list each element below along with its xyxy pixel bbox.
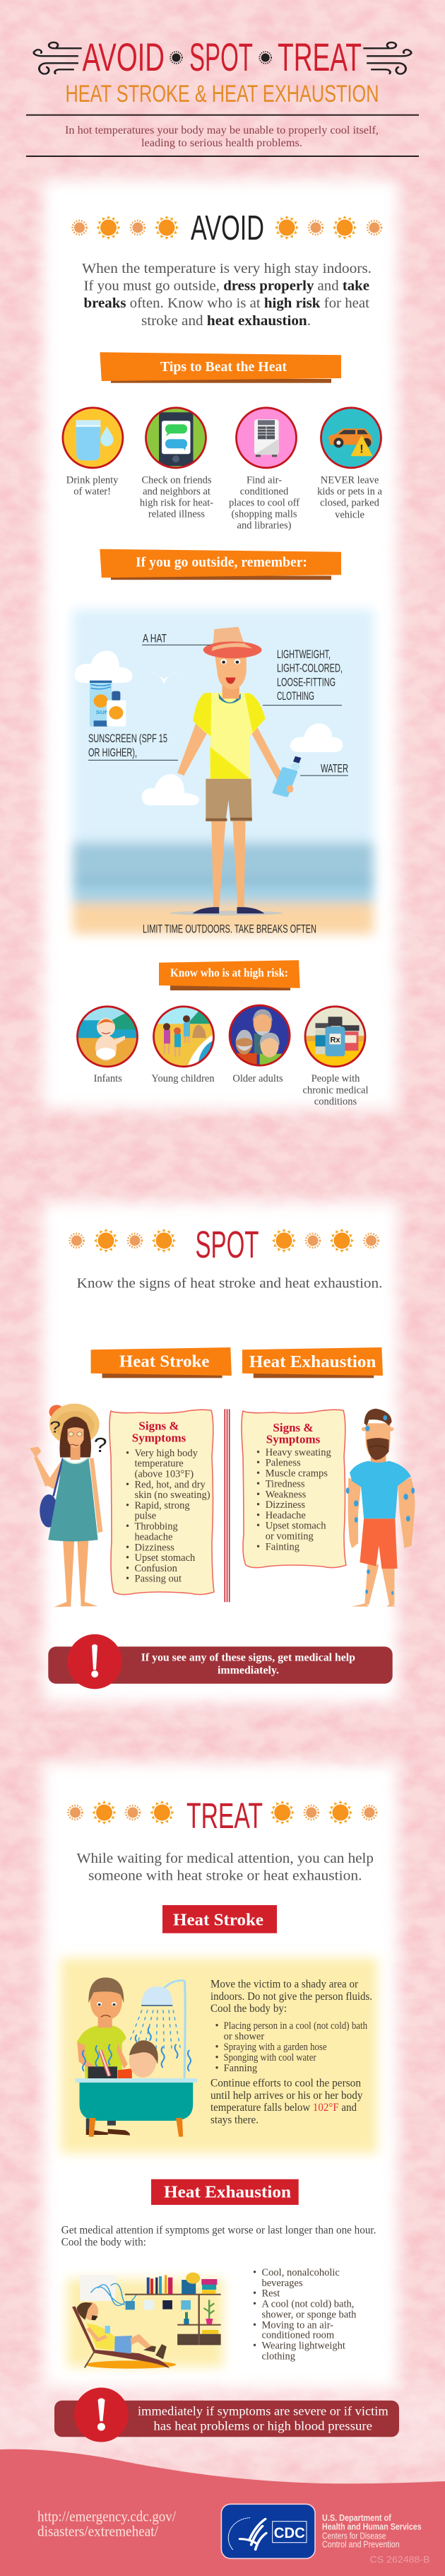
heat exhaustion symptom list: Weakness [266,1489,307,1500]
clothing labels: LIGHTWEIGHT, [277,648,331,661]
title: SPOT [189,35,253,79]
heat exhaustion cooling list: conditioned room [261,2330,335,2341]
footer link: http://emergency.cdc.gov/ [37,2508,176,2525]
risk captions: Infants [94,1073,122,1084]
CDC HHS logo [221,2504,315,2558]
heat exhaustion cooling list [253,2267,357,2362]
heat stroke symptom list: • [126,1574,129,1585]
heat stroke symptom list: skin (no sweating) [134,1489,210,1501]
heat exhaustion symptom list: • [256,1489,260,1500]
risk captions: People with [312,1073,360,1084]
heat stroke symptom list: Rapid, strong [134,1500,190,1511]
risk captions: conditions [314,1096,357,1107]
heat exhaustion cooling list: • [253,2298,256,2309]
title [82,35,362,79]
heat exhaustion symptom list: Dizziness [266,1499,305,1511]
icon: car with warning sign: ! [360,442,364,455]
intro text [65,124,379,149]
heat stroke instructions: temperature falls below 102°F and [210,2102,357,2114]
heat exhaustion cooling list: beverages [261,2278,303,2289]
heat exhaustion cooling list: • [253,2267,256,2278]
heat stroke symptom list: headache [134,1531,172,1542]
heat stroke instructions: Move the victim to a shady area or [210,1979,359,1991]
heat stroke instructions: indoors. Do not give the person fluids. [210,1991,372,2003]
heat stroke symptom list: • [126,1500,129,1511]
panel: heat stroke treatment [61,1958,377,2153]
risk captions: Young children [151,1073,215,1084]
header [26,35,419,157]
icon: glass of water [63,408,123,468]
signs and symptoms heading: Signs & [138,1419,179,1433]
footer link [37,2508,176,2539]
HHS and CDC department text [322,2513,422,2549]
treat intro text: While waiting for medical attention, you can help [76,1851,374,1866]
signs and symptoms heading [266,1421,321,1446]
callout: get medical help: If you see any of these signs, get medical help [141,1651,355,1663]
heat stroke symptom list [126,1448,210,1585]
icon: young children on beach [153,1006,214,1067]
clouds, bird [74,651,343,752]
avoid intro text [82,261,372,329]
banner: know who is at high risk: Know who is at high risk: [170,966,288,980]
avoid intro text: If you must go outside, dress properly and take [83,279,369,294]
heat exhaustion symptom list: • [256,1521,260,1532]
risk captions: chronic medical [302,1084,369,1096]
heat exhaustion symptom list: Paleness [266,1458,301,1469]
banner: know who is at high risk [159,960,300,990]
sunscreen bottles: SUN [96,710,109,715]
banner: if you go outside [100,549,341,580]
tip captions: vehicle [335,509,364,520]
banner: tips to beat the heat: Tips to Beat the Heat [160,359,287,375]
tip captions: kids or pets in a [317,486,382,497]
signs and symptoms heading: Symptoms [266,1432,321,1446]
heat stroke symptom list: temperature [134,1458,184,1470]
heat exhaustion symptom list: • [256,1478,260,1489]
heat exhaustion symptom list: Upset stomach [266,1521,326,1532]
heat stroke symptom list: Very high body [134,1448,198,1459]
heat exhaustion symptom list: • [256,1541,260,1552]
icon: exclamation [74,2388,129,2442]
icon: older adults [230,1005,290,1072]
clothing labels: LIGHT-COLORED, [277,662,343,675]
heat stroke symptom list: • [126,1448,129,1459]
heat stroke symptom list: Dizziness [134,1542,174,1553]
label: heat exhaustion: Heat Exhaustion [164,2183,291,2201]
heat exhaustion cooling list: A cool (not cold) bath, [261,2298,354,2309]
tip captions: conditioned [240,486,289,497]
signs and symptoms heading: Symptoms [132,1431,186,1444]
heat stroke symptom list: Throbbing [134,1521,178,1533]
card: heat exhaustion signs and symptoms [242,1410,346,1568]
HHS and CDC department text: Health and Human Services [322,2522,422,2532]
HHS and CDC department text: U.S. Department of [322,2513,391,2523]
heat exhaustion cooling list: • [253,2341,256,2352]
banner: heat stroke [91,1347,232,1378]
heat stroke instructions: Spraying with a garden hose [224,2042,327,2053]
heat exhaustion symptom list: Headache [266,1510,306,1521]
banner: heat stroke: Heat Stroke [119,1352,210,1371]
tip captions: of water! [73,486,111,497]
banner: heat exhaustion [242,1347,383,1378]
heat exhaustion symptom list: Muscle cramps [266,1468,328,1480]
heat exhaustion cooling list: Moving to an air- [261,2319,333,2331]
heat exhaustion symptom list: Heavy sweating [266,1447,331,1458]
heat stroke instructions: Placing person in a cool (not cold) bath [224,2020,368,2032]
clothing labels: A HAT [143,631,167,645]
heat exhaustion symptom list: • [256,1468,260,1480]
callout: seek help immediately [54,2388,399,2442]
tip captions: closed, parked [320,497,380,508]
panel: treat [42,1762,398,2389]
heat exhaustion intro: Cool the body with: [61,2237,146,2249]
heat exhaustion intro: Get medical attention if symptoms get worse or last longer than one hour. [61,2224,376,2236]
callout: get medical help: immediately. [218,1664,279,1676]
heat stroke symptom list: • [126,1479,129,1490]
intro text: In hot temperatures your body may be unable to properly cool itself, [65,124,379,136]
spot intro text: Know the signs of heat stroke and heat exhaustion. [76,1276,383,1292]
illustration: woman with heat stroke: ? [49,1419,61,1436]
callout: seek help immediately: has heat problems or high blood pressure [153,2418,372,2432]
heat exhaustion symptom list [256,1447,331,1552]
icon: left wind swirl [34,42,81,74]
HHS and CDC department text: Centers for Disease [322,2531,386,2541]
tip captions: related illness [148,508,205,520]
tip captions: high risk for heat- [140,497,213,508]
icon: exclamation [68,1634,122,1689]
heat exhaustion symptom list: • [256,1499,260,1511]
label: heat stroke: Heat Stroke [173,1911,263,1929]
heat exhaustion symptom list: • [256,1458,260,1469]
icon: right wind swirl [364,42,411,74]
icon: phone with text messages [146,408,206,468]
section heading: treat [68,1796,376,1836]
signs and symptoms heading [132,1419,186,1444]
man figure [142,627,301,915]
heat exhaustion cooling list: • [253,2288,256,2299]
section heading: spot: SPOT [195,1224,259,1266]
clothing labels: OR HIGHER), [88,746,137,759]
heat exhaustion cooling list: clothing [261,2350,295,2362]
banner: tips to beat the heat [100,352,341,383]
heat exhaustion symptom list: Fainting [266,1541,299,1552]
tip captions [66,474,382,531]
treat intro text [76,1851,374,1883]
heat stroke instructions [210,1979,372,2126]
clothing labels [88,631,348,935]
heat stroke instructions: • [215,2042,219,2053]
panel: spot [30,1202,415,1704]
heat exhaustion symptom list: or vomiting [266,1531,314,1542]
heat stroke instructions: Sponging with cool water [224,2052,316,2063]
sunscreen bottles [90,681,126,727]
heat stroke symptom list: Confusion [134,1563,178,1574]
heat stroke symptom list: • [126,1542,129,1553]
heat stroke symptom list: Passing out [134,1574,182,1585]
heat stroke instructions: Cool the body by: [210,2003,287,2015]
tip captions: Check on friends [141,474,212,486]
heat stroke instructions: Continue efforts to cool the person [210,2078,361,2090]
heat stroke symptom list: Red, hot, and dry [134,1479,206,1490]
label: heat exhaustion [151,2179,299,2205]
clothing labels: CLOTHING [277,689,314,703]
publication code: CS 262488-B [370,2554,429,2565]
title: TREAT [278,35,362,79]
heat exhaustion symptom list: Tiredness [266,1478,305,1489]
heat stroke instructions: • [215,2020,219,2032]
heat stroke symptom list: • [126,1521,129,1533]
footer link: disasters/extremeheat/ [37,2522,158,2539]
tip captions: and neighbors at [143,486,210,497]
heat exhaustion cooling list: • [253,2319,256,2331]
HHS and CDC department text: Control and Prevention [322,2539,400,2549]
heat stroke instructions: or shower [224,2031,264,2042]
icon: car with warning sign [321,408,381,468]
clothing labels: SUNSCREEN (SPF 15 [88,732,167,745]
illustration: man resting on lounger with water [67,2273,223,2369]
intro text: leading to serious health problems. [141,137,302,149]
heat stroke symptom list: pulse [134,1511,156,1522]
heat stroke symptom list: • [126,1552,129,1564]
illustration: woman with heat stroke [30,1404,107,1607]
illustration: sweating man with heat exhaustion [346,1409,415,1607]
heat stroke symptom list: • [126,1563,129,1574]
heat exhaustion symptom list: • [256,1510,260,1521]
tip captions: (shopping malls [231,508,297,520]
illustration: woman with heat stroke: ? [94,1434,107,1456]
heat stroke symptom list: (above 103°F) [134,1468,194,1480]
heat exhaustion cooling list: shower, or sponge bath [261,2309,357,2320]
heat exhaustion cooling list: Rest [261,2288,280,2299]
callout: get medical help [48,1634,393,1689]
title: AVOID [82,35,165,79]
tip captions: NEVER leave [321,474,379,486]
tip captions: and libraries) [237,520,292,531]
icon: title sun 2 [259,52,271,64]
icon: infant on beach [77,1006,138,1067]
treat intro text: someone with heat stroke or heat exhaustion. [88,1868,362,1883]
avoid intro text: breaks often. Know who is at high risk for heat [83,295,369,311]
section heading: treat: TREAT [186,1796,263,1836]
clothing labels: LOOSE-FITTING [277,676,336,689]
section heading: avoid [72,209,381,247]
avoid intro text: When the temperature is very high stay indoors. [82,261,372,276]
footer [0,2449,445,2576]
illustration: man dressed for the beach [73,609,374,935]
section heading: avoid: AVOID [191,209,264,247]
heat stroke symptom list: Upset stomach [134,1552,196,1564]
tip captions: Find air- [247,474,282,486]
section heading: spot [69,1224,379,1266]
panel: avoid [42,179,398,1110]
card: heat stroke signs and symptoms [109,1410,214,1595]
heat exhaustion intro [61,2224,376,2249]
banner: heat exhaustion: Heat Exhaustion [249,1353,376,1371]
heat stroke instructions: • [215,2063,219,2074]
banner: if you go outside: If you go outside, remember: [136,555,307,570]
avoid intro text: stroke and heat exhaustion . [141,313,311,329]
icon: title sun 1 [170,52,182,64]
heat exhaustion cooling list: Wearing lightweight [261,2341,345,2352]
heat stroke instructions: Fanning [224,2063,257,2074]
CDC HHS logo: CDC [274,2525,305,2541]
beach background [73,609,374,934]
risk captions [94,1073,368,1107]
signs and symptoms heading: Signs & [273,1421,314,1434]
clothing labels: LIMIT TIME OUTDOORS. TAKE BREAKS OFTEN [143,922,316,935]
label: heat stroke [162,1905,277,1933]
tip captions: Drink plenty [66,474,119,486]
tip captions: places to cool off [229,497,299,508]
icon: portable air conditioner [236,408,297,468]
illustration: person cooled in bathtub shower [75,1977,197,2137]
heat exhaustion symptom list: • [256,1447,260,1458]
heat exhaustion cooling list: Cool, nonalcoholic [261,2267,340,2278]
heat stroke instructions: stays there. [210,2114,259,2126]
heat stroke instructions: • [215,2052,219,2063]
icon: medicine bottles: Rx [330,1036,340,1044]
risk captions: Older adults [232,1073,283,1084]
icon: medicine bottles [305,1007,366,1067]
heat stroke instructions: until help arrives or his or her body [210,2090,363,2102]
callout: seek help immediately: immediately if symptoms are severe or if victim [138,2404,388,2418]
clothing labels: WATER [321,762,348,775]
